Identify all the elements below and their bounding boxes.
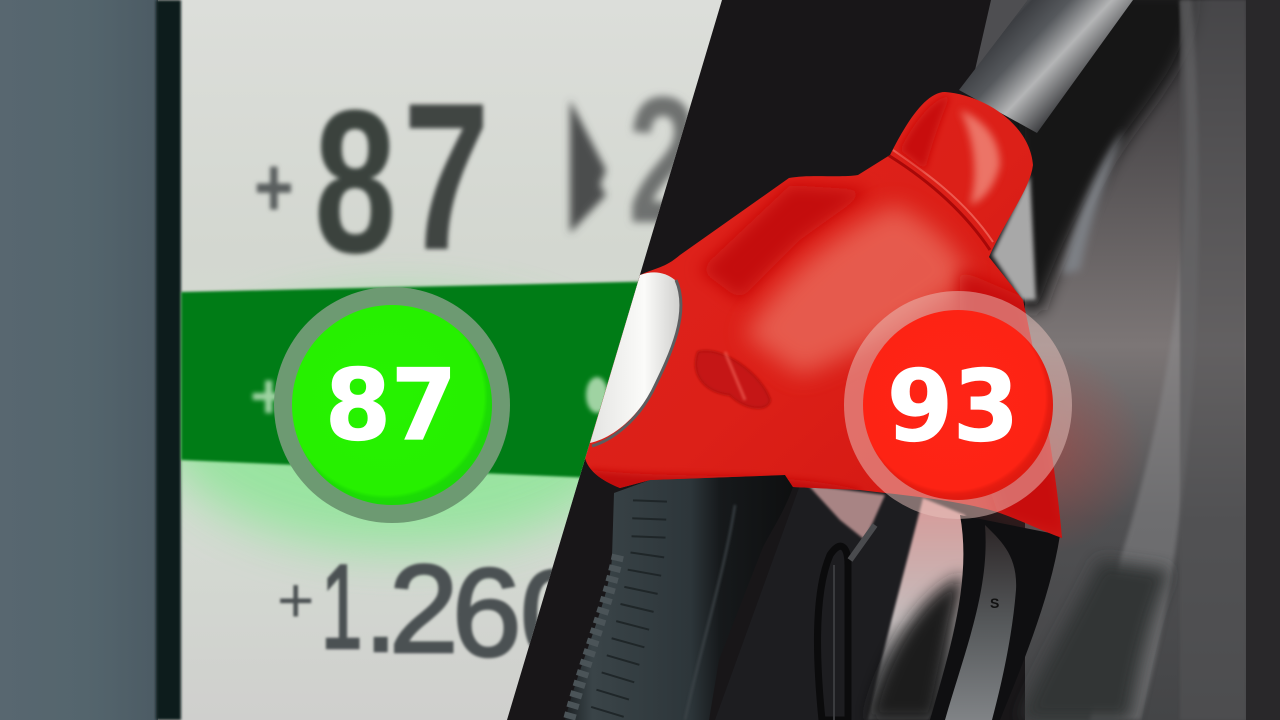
blurred display number +1.260: 0 xyxy=(520,546,590,685)
green price band xyxy=(181,281,670,480)
blurred display number +1.260: . xyxy=(364,543,397,677)
blurred display number +87: 8 xyxy=(314,68,396,295)
blurred display number +1.260 xyxy=(278,562,552,660)
blurred display number +1.260: 6 xyxy=(452,544,522,683)
handle grip xyxy=(565,475,793,720)
badge: 93 red: 93 xyxy=(887,350,1019,464)
blurred band characters xyxy=(250,374,608,416)
blurred display number +1.260: 1 xyxy=(321,541,362,674)
green glow on display xyxy=(160,300,640,550)
badge: 93 red xyxy=(844,291,1072,519)
trigger guard and lever xyxy=(807,488,1060,720)
blurred display number +87: + xyxy=(254,141,294,235)
blurred display number +1.260: 2 xyxy=(389,540,459,679)
badge: 87 green: 87 xyxy=(325,349,457,463)
blurred display number +87: 7 xyxy=(403,61,490,294)
red glow behind badge xyxy=(976,372,1127,536)
chrome nozzle cap xyxy=(590,272,681,446)
blurred display symbols xyxy=(564,91,690,235)
red nozzle body xyxy=(585,92,1062,538)
trigger guard and lever: S xyxy=(990,595,999,611)
hose xyxy=(959,0,1133,133)
panel: right dark pump photo xyxy=(500,0,1280,720)
panel: left pump display xyxy=(0,0,725,720)
blurred band characters: + xyxy=(250,360,287,432)
blurred display symbols: 2 xyxy=(628,59,698,260)
badge: 87 green xyxy=(274,287,510,523)
pump body panel xyxy=(975,0,1280,720)
blurred display number +1.260: + xyxy=(277,564,314,636)
metal side strip xyxy=(0,0,181,720)
nozzle shading xyxy=(700,185,870,300)
blurred display number +87 xyxy=(254,101,486,258)
